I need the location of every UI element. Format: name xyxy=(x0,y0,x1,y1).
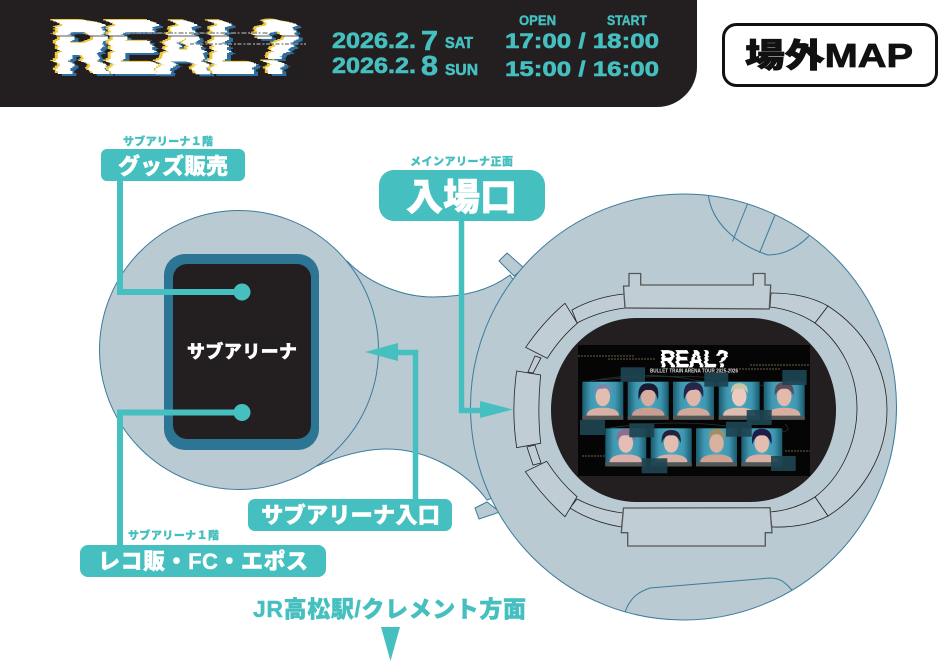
arrow to main arena xyxy=(480,401,513,418)
date row 1: SAT xyxy=(445,35,473,52)
main arena stands xyxy=(514,274,887,546)
portrait 6 xyxy=(605,428,646,466)
poster subtitle: BULLET TRAIN ARENA TOUR 2025-2026 xyxy=(650,368,738,374)
south stand xyxy=(621,508,772,546)
poster tiny code lines xyxy=(578,356,810,456)
portrait 9 xyxy=(741,428,782,466)
bottom plaza xyxy=(625,578,792,612)
goods floor note: サブアリーナ１階 xyxy=(123,134,213,148)
poster cables xyxy=(590,376,805,432)
arrow to sub arena xyxy=(365,343,398,361)
portrait 8 xyxy=(696,428,737,466)
map title button xyxy=(724,24,936,86)
REAL? glitch logo: REAL? xyxy=(55,8,299,88)
main entrance note: メインアリーナ正面 xyxy=(410,155,513,168)
tour poster xyxy=(578,345,810,476)
lower tab xyxy=(475,502,500,519)
callout: main entrance xyxy=(379,155,545,418)
direction arrow xyxy=(381,627,400,661)
callout: sub arena entrance xyxy=(248,343,452,531)
sub arena entrance label: サブアリーナ入口 xyxy=(261,502,440,528)
south west stand xyxy=(525,461,577,517)
times row 1: 17:00 / 18:00 xyxy=(505,30,659,53)
date row 2: 8 xyxy=(421,50,438,81)
open and start labels: OPEN xyxy=(519,12,556,28)
sub arena label: サブアリーナ xyxy=(187,341,297,362)
north stand xyxy=(624,274,771,309)
callout: record sales xyxy=(80,404,326,577)
connector between arenas xyxy=(240,261,560,500)
date row 1 xyxy=(332,25,473,56)
header band xyxy=(0,0,697,107)
date row 2: 2026.2. xyxy=(332,53,416,78)
portrait 1 xyxy=(582,382,623,420)
goods label: グッズ販売 xyxy=(118,154,228,179)
ring segments xyxy=(770,293,828,323)
arena floor xyxy=(551,318,836,502)
main arena grounds xyxy=(470,194,896,620)
sub arena building xyxy=(164,254,319,450)
marker dot goods xyxy=(234,284,250,300)
direction label: JR高松駅/クレメント方面 xyxy=(253,596,526,622)
main entrance label: 入場口 xyxy=(406,177,517,218)
west stand xyxy=(514,371,541,448)
map title button: 場外MAP xyxy=(745,37,913,74)
poster title: REAL? xyxy=(660,346,728,373)
poster info tags xyxy=(580,367,807,473)
times row 2: 15:00 / 16:00 xyxy=(505,58,659,81)
open and start labels xyxy=(519,12,647,28)
sub arena grounds xyxy=(100,210,378,490)
upper tab xyxy=(499,253,524,276)
date row 1: 7 xyxy=(421,25,438,56)
portrait 4 xyxy=(719,382,760,420)
marker dot record sales xyxy=(234,404,250,421)
logo glitch streaks xyxy=(50,33,306,44)
open and start labels: START xyxy=(607,12,647,28)
date row 2: SUN xyxy=(445,62,478,79)
venue grounds xyxy=(100,194,896,620)
top right plaza xyxy=(708,196,809,255)
portrait 7 xyxy=(651,428,692,466)
record sales floor note: サブアリーナ１階 xyxy=(128,528,219,542)
portrait 2 xyxy=(628,382,669,420)
date row 1: 2026.2. xyxy=(332,28,416,53)
date row 2 xyxy=(332,50,478,81)
portrait 3 xyxy=(673,382,714,420)
north west stand xyxy=(526,303,577,358)
callout: goods xyxy=(101,134,250,300)
record sales label: レコ販・FC・エポス xyxy=(98,549,308,574)
portrait 5 xyxy=(764,382,805,420)
